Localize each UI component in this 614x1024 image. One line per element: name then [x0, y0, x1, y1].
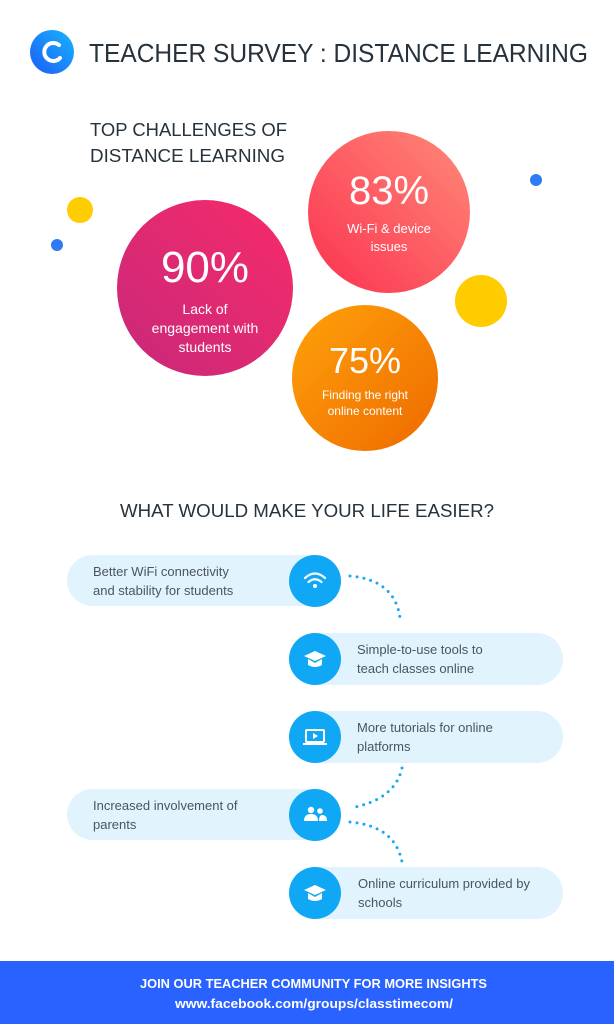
item 2: tools: Simple-to-use tools to	[357, 642, 483, 657]
item 3: tutorials: platforms	[357, 739, 411, 754]
item 1: wifi: Better WiFi connectivity	[93, 564, 229, 579]
item 1: wifi: and stability for students	[93, 583, 234, 598]
bubble: 83%: 83%	[349, 169, 429, 213]
bubble: 83%: issues	[371, 239, 408, 254]
title: TEACHER SURVEY : DISTANCE LEARNING	[89, 38, 588, 68]
item 1: wifi	[67, 555, 341, 607]
item 4: parents	[67, 789, 341, 841]
heading: top challenges: TOP CHALLENGES OF	[90, 119, 287, 140]
bubble: 75%: Finding the right	[322, 388, 409, 402]
bubble: 90%: 90%	[161, 243, 249, 292]
bubble: 90%	[117, 200, 293, 376]
heading: what would make life easier: WHAT WOULD MAKE YOUR LIFE EASIER?	[120, 501, 494, 521]
item 3: tutorials: More tutorials for online	[357, 720, 493, 735]
logo	[30, 30, 74, 74]
item 5: curriculum	[289, 867, 563, 919]
bubble: 90%: students	[179, 339, 231, 355]
footer	[0, 961, 614, 1024]
decorative dots	[51, 174, 542, 327]
heading: top challenges: DISTANCE LEARNING	[90, 145, 285, 166]
bubble: 75%	[292, 305, 438, 451]
item 2: tools	[289, 633, 563, 685]
connectors	[350, 576, 402, 862]
bubble: 90%: engagement with	[152, 320, 258, 336]
bubble: 75%: 75%	[329, 340, 401, 381]
item 4: parents: parents	[93, 817, 137, 832]
item 5: curriculum: Online curriculum provided by	[358, 876, 530, 891]
item 3: tutorials	[289, 711, 563, 763]
bubble: 90%: Lack of	[182, 301, 228, 317]
bubble: 75%: online content	[328, 404, 403, 418]
item 2: tools: teach classes online	[357, 661, 474, 676]
item 4: parents: Increased involvement of	[93, 798, 238, 813]
item 5: curriculum: schools	[358, 895, 403, 910]
bubble: 83%	[308, 131, 470, 293]
footer: www.facebook.com/groups/classtimecom/	[174, 997, 454, 1011]
footer: JOIN OUR TEACHER COMMUNITY FOR MORE INSIGHTS	[140, 977, 487, 991]
bubble: 83%: Wi-Fi & device	[347, 221, 431, 236]
